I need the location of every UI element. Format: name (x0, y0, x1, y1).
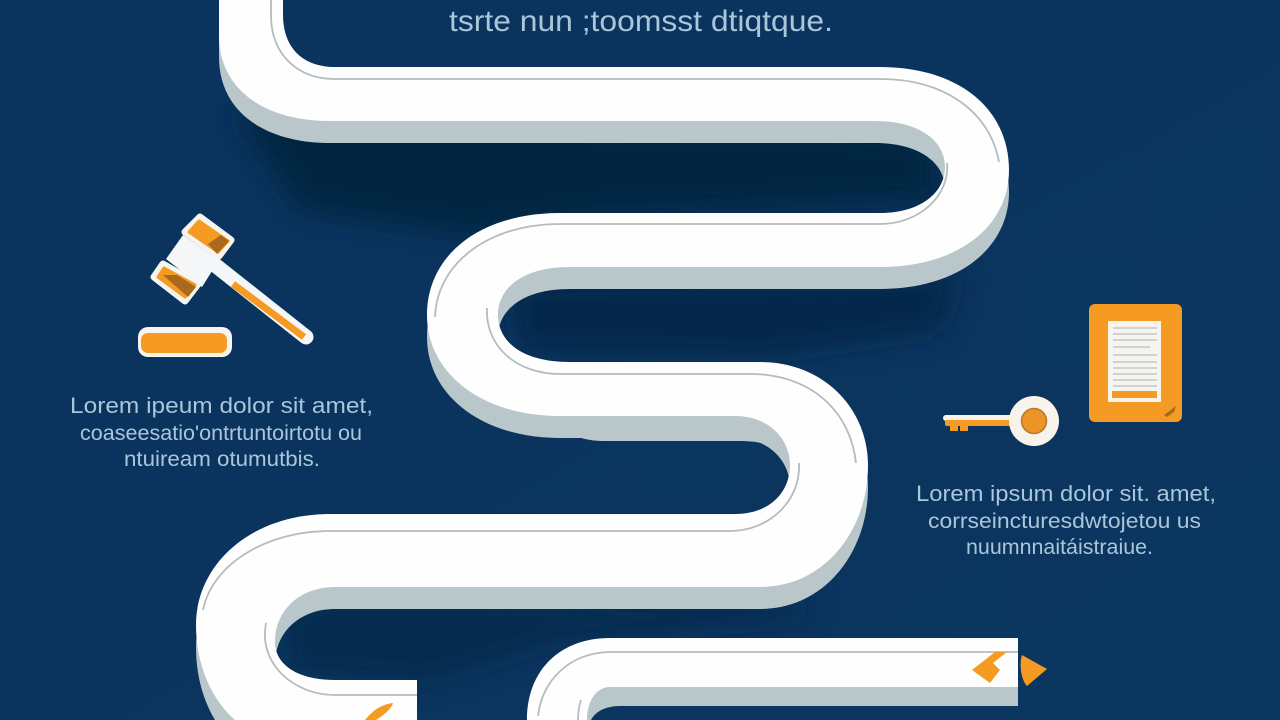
road side wall (196, 0, 1009, 720)
right text block (916, 481, 1216, 559)
key shaft (943, 415, 1013, 421)
right text line 2: corrseincturesdwtojetou us (928, 510, 1201, 533)
right text line 1: Lorem ipsum dolor sit. amet, (916, 481, 1216, 506)
gavel upper block outline (185, 217, 231, 256)
icon: key (943, 396, 1059, 446)
key bow centre (1022, 408, 1046, 434)
document sheet (1108, 321, 1161, 402)
icon: document (1089, 304, 1182, 422)
key shaft lower (945, 420, 1011, 426)
road shadows (235, 110, 960, 680)
road top surface (196, 0, 1009, 720)
lower road side wall (580, 687, 1018, 720)
left text line 1: Lorem ipeum dolor sit amet, (70, 393, 373, 418)
road side wall extension (560, 425, 786, 456)
left text line 3: ntuiream otumutbis. (124, 448, 320, 471)
icon: gavel base (138, 327, 232, 357)
gavel lower block shade (163, 275, 196, 297)
base outline (138, 327, 232, 357)
arrow head (1021, 655, 1047, 686)
left text line 2: coaseesatio'ontrtuntoirtotu ou (80, 422, 362, 445)
document footer bar (1112, 391, 1157, 398)
gavel handle stripe (233, 284, 304, 337)
gavel head centre (166, 235, 219, 287)
base fill (141, 333, 227, 353)
gavel upper block shade (208, 235, 229, 254)
key teeth (950, 425, 968, 431)
road edge lines (203, 0, 999, 695)
document panel (1089, 304, 1182, 422)
icon: gavel (154, 217, 306, 337)
lower road section (527, 638, 1047, 720)
right text line 3: nuumnnaitáistraiue. (966, 536, 1153, 559)
arrow mark on road (972, 652, 1007, 683)
road arrow mark lower (365, 703, 393, 720)
left text block (70, 393, 373, 471)
gavel lower block outline (154, 264, 198, 301)
key bow (1009, 396, 1059, 446)
document corner mark (1164, 406, 1176, 417)
gavel upper block (189, 221, 228, 252)
lower road top surface (527, 638, 1018, 720)
winding road (196, 0, 1009, 720)
top text: tsrte nun ;toomsst dtiqtque. (449, 5, 833, 38)
gavel handle (215, 265, 306, 337)
document text lines (1113, 328, 1157, 386)
gavel lower block (158, 268, 195, 297)
lower road edge lines (538, 652, 1018, 720)
